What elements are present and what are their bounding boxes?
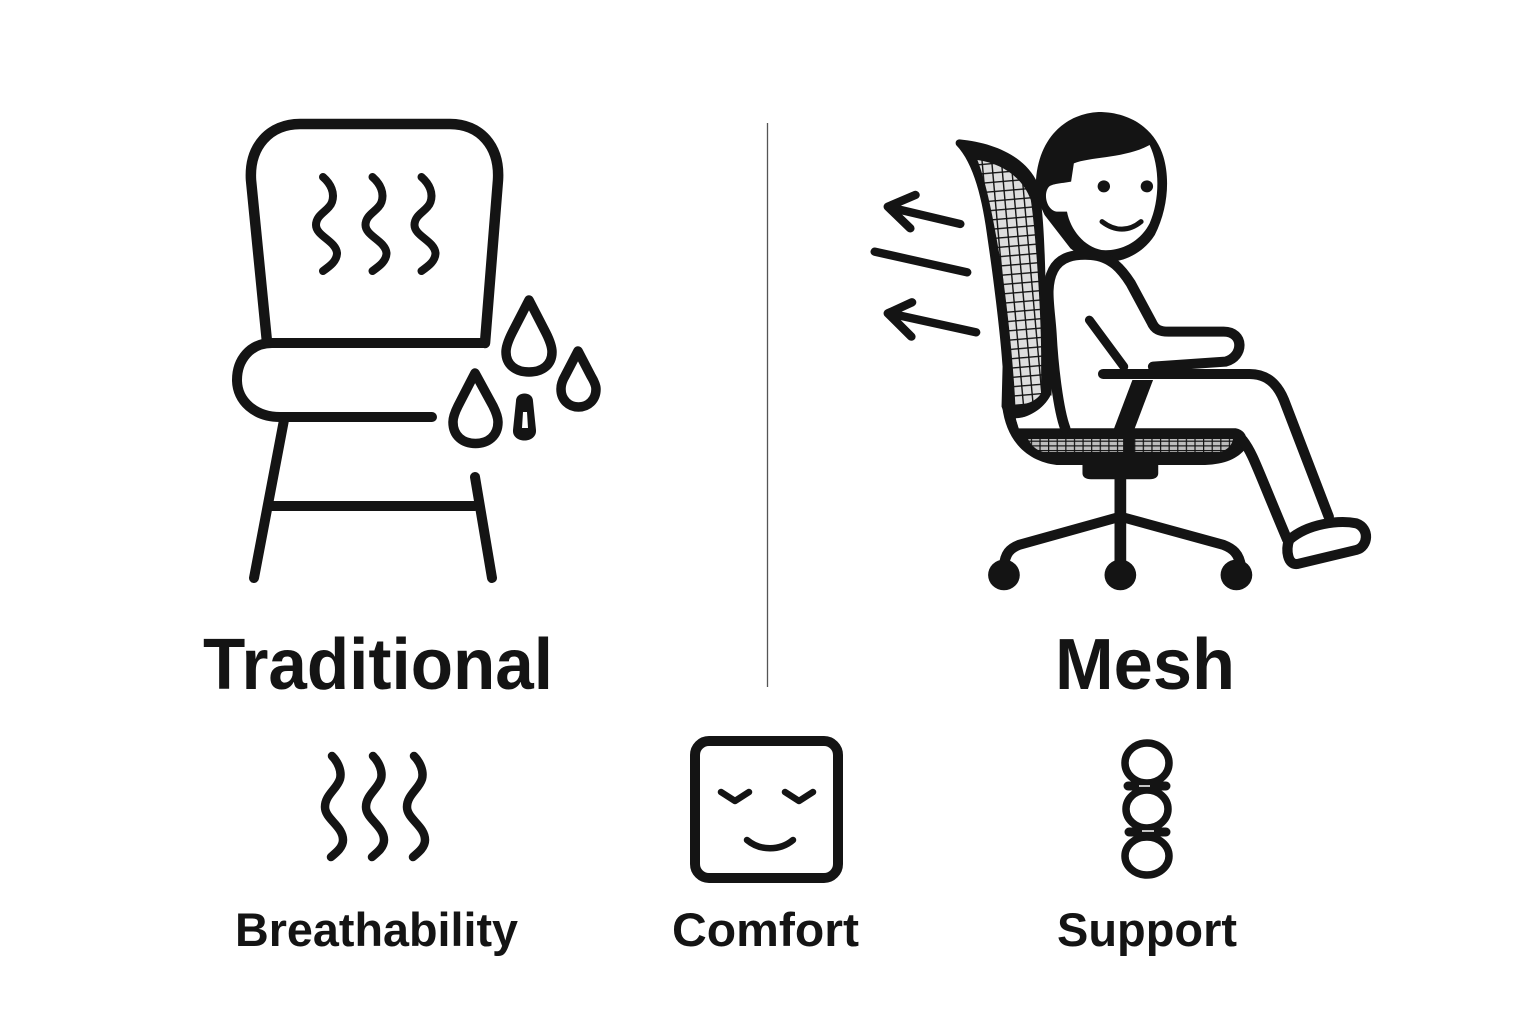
sweat drops bbox=[453, 300, 596, 444]
icon: breathability waves bbox=[325, 756, 425, 857]
airflow arrows bbox=[875, 195, 976, 337]
chair base and wheels bbox=[988, 465, 1252, 590]
mesh chair seat bbox=[1002, 395, 1247, 465]
person head and hair bbox=[1036, 112, 1167, 261]
heat waves on chair back bbox=[316, 177, 436, 271]
divider line bbox=[766, 123, 768, 687]
label: Comfort: Comfort bbox=[672, 903, 859, 956]
heading: Mesh: Mesh bbox=[1055, 625, 1235, 705]
chair legs and rung bbox=[254, 420, 492, 578]
icon: person in mesh chair bbox=[875, 112, 1366, 590]
icon: support spine bbox=[1125, 743, 1169, 875]
icon: traditional chair with heat and sweat bbox=[237, 124, 596, 578]
chair seat bbox=[237, 343, 485, 417]
chair back bbox=[251, 124, 498, 343]
label: Breathability: Breathability bbox=[235, 903, 518, 956]
heading: Traditional: Traditional bbox=[203, 625, 553, 705]
mesh chair back bbox=[956, 139, 1052, 420]
icon: comfort face bbox=[695, 741, 838, 878]
person torso, arm and legs bbox=[1048, 255, 1366, 564]
label: Support: Support bbox=[1057, 903, 1237, 956]
